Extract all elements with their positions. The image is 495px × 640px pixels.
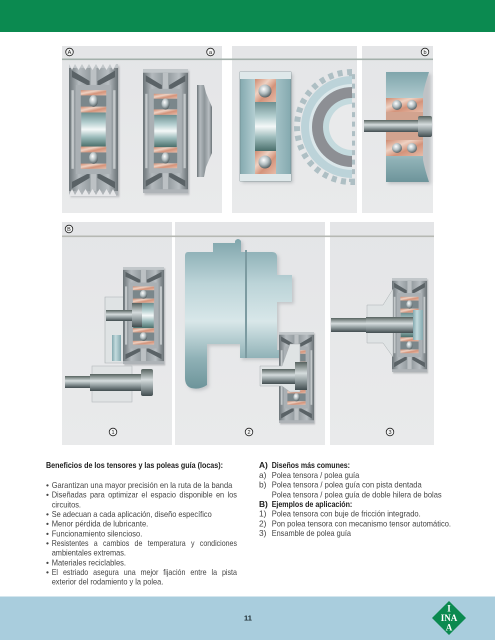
legend: Polea tensora / polea guía <box>272 470 360 480</box>
legend: Pon polea tensora con mecanismo tensor automático. <box>272 518 451 528</box>
benefits list: • <box>46 480 49 490</box>
icon: grooved pulley <box>69 63 119 197</box>
label 1: 1 <box>111 430 115 436</box>
icon: flat pulley <box>143 69 189 195</box>
legend <box>259 460 451 538</box>
benefits list: • <box>46 567 49 577</box>
panel A: common designs <box>62 46 433 213</box>
legend: Polea tensora con buje de fricción integrado. <box>272 509 421 519</box>
benefits list: Menor pérdida de lubricante. <box>52 519 148 529</box>
icon: cover disc <box>197 85 212 177</box>
legend: Diseños más comunes: <box>272 460 350 470</box>
benefits list: • <box>46 538 49 548</box>
icon: toothed gear <box>297 72 352 182</box>
label 3 <box>386 428 394 436</box>
legend: 3) <box>259 528 267 538</box>
top green bar <box>0 0 495 32</box>
logo: INA: A <box>446 622 453 632</box>
icon: pulley with friction bushing <box>65 267 165 402</box>
benefits list: Funcionamiento silencioso. <box>52 528 142 538</box>
legend: Ensamble de polea guía <box>272 528 351 538</box>
legend: Polea tensora / polea guía de doble hilera de bolas <box>272 489 442 499</box>
label b <box>421 48 429 56</box>
legend: Ejemplos de aplicación: <box>272 499 352 509</box>
footer band <box>0 596 495 640</box>
label a <box>207 48 214 56</box>
benefits list: • <box>46 519 49 529</box>
icon: double row pulley with bolt <box>364 72 432 184</box>
label B <box>65 225 73 233</box>
legend: a) <box>259 470 267 480</box>
label 2: 2 <box>247 430 251 436</box>
benefits list: • <box>46 490 49 500</box>
legend: b) <box>259 480 267 490</box>
logo: INA: I <box>447 604 451 614</box>
benefits list: El estriado asegura una mejor fijación entre la pista <box>52 567 237 577</box>
icon: guide pulley assembly <box>331 278 428 373</box>
legend: Polea tensora / polea guía con pista dentada <box>272 480 422 490</box>
benefits list: exterior del rodamiento y la polea. <box>52 577 163 587</box>
icon: toothed bearing section <box>240 72 293 183</box>
legend: A) <box>259 460 268 470</box>
legend: 1) <box>259 509 267 519</box>
logo: INA: INA <box>441 613 458 623</box>
panel B: application examples <box>62 222 434 445</box>
label a: a <box>209 50 213 56</box>
benefits list: Se adecuan a cada aplicación, diseño específico <box>52 509 212 519</box>
label 2 <box>245 428 253 436</box>
legend: B) <box>259 499 268 509</box>
benefits list: • <box>46 557 49 567</box>
benefits list: circuitos. <box>52 499 81 509</box>
benefits list <box>46 480 237 587</box>
benefits list: ambientales extremas. <box>52 548 126 558</box>
label B: B <box>67 227 71 233</box>
icon: automatic tensioner casting <box>185 239 315 424</box>
label A <box>66 48 73 56</box>
label 3: 3 <box>388 430 392 436</box>
benefits list: Resistentes a cambios de temperatura y condiciones <box>52 538 237 548</box>
benefits list: • <box>46 509 49 519</box>
label 1 <box>109 428 117 436</box>
label b: b <box>423 50 427 56</box>
benefits list: Diseñadas para optimizar el espacio disponible en los <box>52 490 237 500</box>
benefits list: Garantizan una mayor precisión en la ruta de la banda <box>52 480 233 490</box>
legend: 2) <box>259 518 267 528</box>
benefits heading: Beneficios de los tensores y las poleas guía (locas): <box>46 460 223 470</box>
logo: INA <box>432 601 466 635</box>
page number: 11 <box>244 614 252 622</box>
benefits list: Materiales reciclables. <box>52 557 126 567</box>
benefits list: • <box>46 528 49 538</box>
label A: A <box>68 50 72 56</box>
